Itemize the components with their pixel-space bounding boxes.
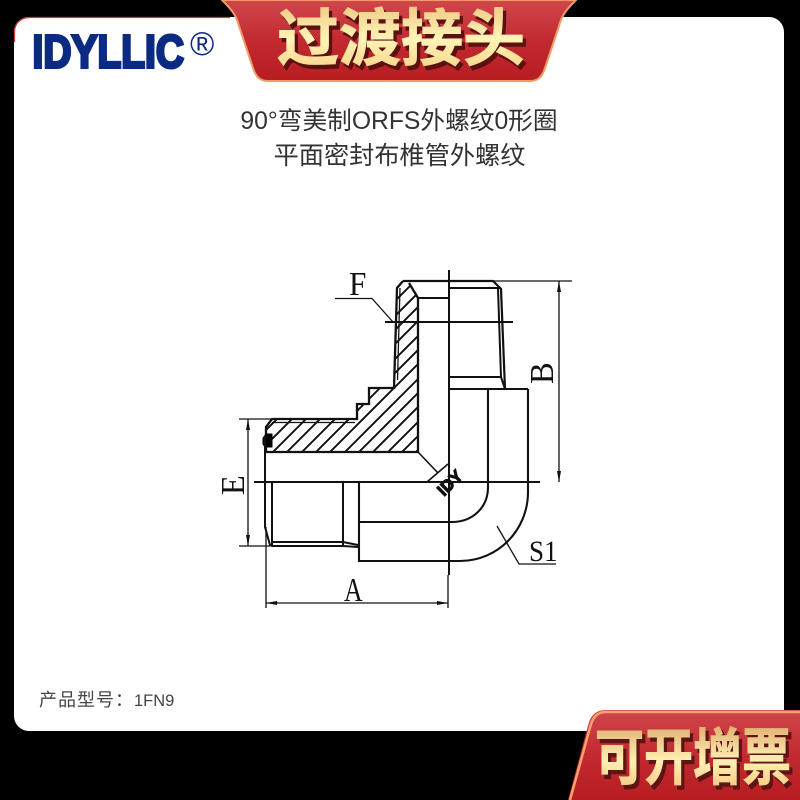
dimension label S1: S1 — [529, 536, 558, 568]
product title: 平面密封布椎管外螺纹 — [274, 142, 525, 170]
dimension label A: A — [344, 571, 363, 609]
dimension label B: B — [523, 362, 561, 384]
badge text: 可开增票 — [598, 728, 794, 796]
logo: registered mark: ® — [190, 25, 214, 62]
badge text: 可开增票 — [595, 724, 791, 792]
banner title: 过渡接头 — [280, 9, 528, 78]
dimension arrows — [246, 281, 561, 605]
dimension lines — [239, 281, 572, 608]
side thread — [265, 436, 358, 547]
invoice badge — [568, 710, 800, 800]
watermark IDY: IDY — [433, 466, 467, 500]
dimension label E: E — [214, 475, 252, 495]
bore chamfer mark — [418, 452, 448, 482]
center lines — [254, 270, 540, 575]
dimension label F: F — [349, 266, 366, 303]
technical drawing: 90 degree elbow fitting — [239, 270, 572, 608]
product model: 产品型号：1FN9 — [39, 690, 174, 710]
top banner — [222, 0, 576, 81]
section outline — [266, 281, 418, 452]
top thread — [403, 281, 528, 389]
elbow body — [359, 389, 528, 561]
logo: IDYLLIC: IDYLLIC — [32, 26, 184, 78]
section hatching — [267, 286, 417, 451]
product title — [240, 107, 558, 170]
banner title: 过渡接头 — [277, 5, 525, 74]
o-ring seal — [263, 434, 272, 447]
product title: 90°弯美制ORFS外螺纹0形圈 — [240, 107, 558, 135]
